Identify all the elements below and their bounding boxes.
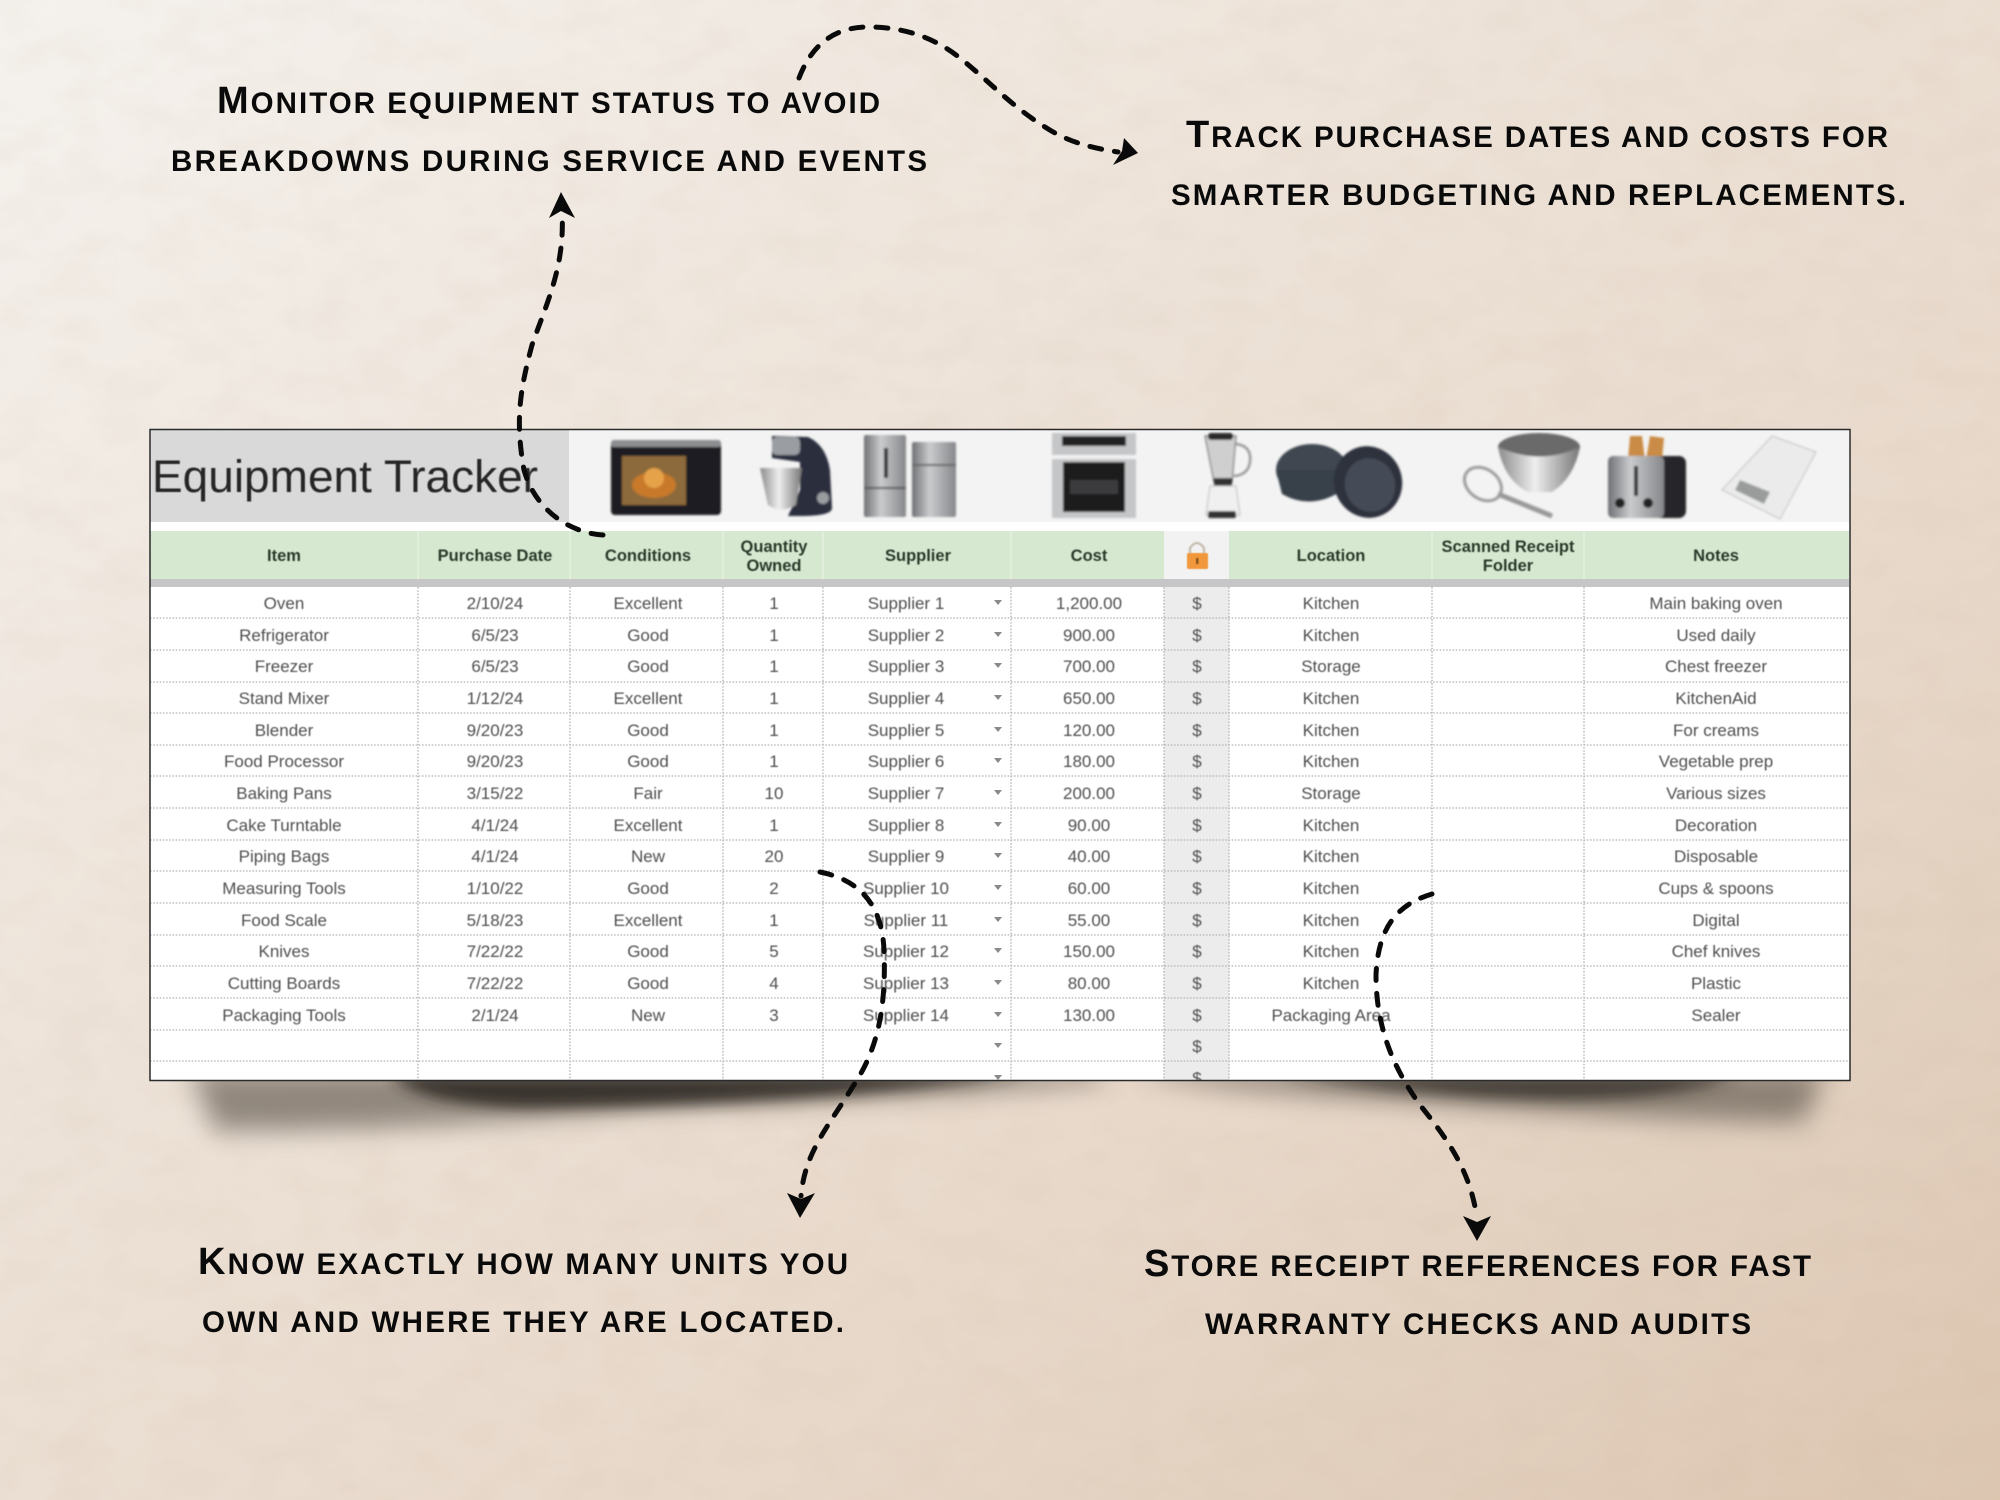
caption: monitor equipment: BREAKDOWNS DURING SERVICE AND EVENTS: [171, 145, 927, 178]
row: Cutting Boards: [228, 974, 1742, 993]
row: Measuring Tools: Measuring Tools: [222, 879, 346, 898]
row: Knives: Good: [627, 942, 669, 961]
caption: track purchase: TRACK PURCHASE DATES AND COSTS FOR: [1186, 114, 1888, 156]
row: Knives: 150.00: [1063, 942, 1115, 961]
empty rows currency marks: [1192, 1037, 1202, 1088]
row: Refrigerator: 900.00: [1063, 626, 1115, 645]
row: Measuring Tools: Cups & spoons: [1658, 879, 1774, 898]
row: Packaging Tools: Supplier 14: [863, 1006, 949, 1025]
row: Knives: Knives: [258, 942, 310, 961]
row: Baking Pans: Baking Pans: [236, 784, 332, 803]
row: Stand Mixer: Supplier 4: [868, 689, 944, 708]
row: Baking Pans: Fair: [633, 784, 663, 803]
row: Stand Mixer: Excellent: [614, 689, 683, 708]
row: Food Scale: $: [1192, 911, 1202, 930]
row: Blender: $: [1192, 721, 1202, 740]
row: Food Processor: Food Processor: [224, 752, 344, 771]
row: Stand Mixer: 650.00: [1063, 689, 1115, 708]
row: Cutting Boards: Plastic: [1691, 974, 1742, 993]
row: Piping Bags: New: [631, 847, 666, 866]
table header row: Supplier: [885, 547, 952, 565]
row: Blender: 120.00: [1063, 721, 1115, 740]
row: Freezer: [255, 657, 1767, 676]
row: Blender: Blender: [255, 721, 314, 740]
caption: track purchase: SMARTER BUDGETING AND REPLACEMENTS.: [1171, 179, 1906, 212]
row: Freezer: Chest freezer: [1665, 657, 1767, 676]
row: Food Scale: [241, 911, 1740, 930]
row: Knives: $: [1192, 942, 1202, 961]
title block: [150, 430, 569, 522]
row: Refrigerator: Refrigerator: [239, 626, 329, 645]
row: Piping Bags: 20: [765, 847, 783, 866]
row: Stand Mixer: Stand Mixer: [239, 689, 330, 708]
row: Blender: [255, 721, 1759, 740]
row: Cutting Boards: $: [1192, 974, 1202, 993]
row: Food Scale: Food Scale: [241, 911, 327, 930]
row: Cake Turntable: Kitchen: [1303, 816, 1359, 835]
supplier dropdown markers: [994, 600, 1002, 1080]
arrow: to units caption: [787, 872, 884, 1218]
row: Food Processor: 180.00: [1063, 752, 1115, 771]
row: Packaging Tools: 3: [769, 1006, 779, 1025]
row: Baking Pans: 3/15/22: [467, 784, 523, 803]
row: Baking Pans: $: [1192, 784, 1202, 803]
icon: blender: [1205, 433, 1250, 518]
row: Stand Mixer: [239, 689, 1757, 708]
row: Cake Turntable: Decoration: [1675, 816, 1757, 835]
table header row: Item: [267, 547, 301, 565]
table header row: Location: [1297, 547, 1365, 565]
row: Freezer: Good: [627, 657, 669, 676]
row: Food Processor: Vegetable prep: [1659, 752, 1773, 771]
row: Cake Turntable: 90.00: [1068, 816, 1110, 835]
caption: know units: [198, 1241, 848, 1339]
row: Food Processor: [224, 752, 1773, 771]
row: Cutting Boards: 7/22/22: [467, 974, 523, 993]
row: Cake Turntable: 4/1/24: [471, 816, 519, 835]
row: Cake Turntable: $: [1192, 816, 1202, 835]
row: Baking Pans: Various sizes: [1666, 784, 1766, 803]
icon: wall oven: [1052, 433, 1136, 518]
row: Food Scale: Kitchen: [1303, 911, 1359, 930]
row: Refrigerator: Supplier 2: [868, 626, 944, 645]
row: Food Processor: 9/20/23: [467, 752, 523, 771]
row: Packaging Tools: [222, 1006, 1741, 1025]
row: Cutting Boards: Good: [627, 974, 669, 993]
row: Blender: 9/20/23: [467, 721, 523, 740]
row: Stand Mixer: 1/12/24: [467, 689, 523, 708]
row: Freezer: 6/5/23: [471, 657, 519, 676]
row: Freezer: Supplier 3: [868, 657, 944, 676]
row: Knives: Kitchen: [1303, 942, 1359, 961]
row: Food Scale: 55.00: [1068, 911, 1110, 930]
row: Piping Bags: Disposable: [1674, 847, 1758, 866]
row: Baking Pans: Supplier 7: [868, 784, 944, 803]
row: Piping Bags: 40.00: [1068, 847, 1110, 866]
caption: store receipts: STORE RECEIPT REFERENCES FOR FAST: [1144, 1243, 1811, 1285]
caption: know units: KNOW EXACTLY HOW MANY UNITS YOU: [198, 1241, 848, 1283]
empty rows currency marks: $: [1192, 1037, 1202, 1056]
row: Oven: 1: [769, 594, 779, 613]
row: Food Processor: Good: [627, 752, 669, 771]
table header row: Cost: [1071, 547, 1108, 565]
row: Stand Mixer: Kitchen: [1303, 689, 1359, 708]
table header row: Owned: [746, 557, 802, 575]
row: Baking Pans: Storage: [1301, 784, 1361, 803]
row: Measuring Tools: Kitchen: [1303, 879, 1359, 898]
row: Refrigerator: 1: [769, 626, 779, 645]
row: Packaging Tools: Packaging Tools: [222, 1006, 346, 1025]
row: Food Processor: Supplier 6: [868, 752, 944, 771]
row: Freezer: 700.00: [1063, 657, 1115, 676]
row: Freezer: 1: [769, 657, 779, 676]
row: Refrigerator: Used daily: [1676, 626, 1756, 645]
row: Freezer: Freezer: [255, 657, 314, 676]
table header row: Purchase Date: [438, 547, 552, 565]
row: Measuring Tools: Good: [627, 879, 669, 898]
caption: track purchase: [1171, 114, 1906, 212]
icon: kitchen scale: [1722, 436, 1816, 519]
row: Piping Bags: Kitchen: [1303, 847, 1359, 866]
arrow: to purchase caption: [799, 27, 1138, 165]
caption: monitor equipment: MONITOR EQUIPMENT STATUS TO AVOID: [217, 80, 880, 122]
row: Oven: 1,200.00: [1056, 594, 1122, 613]
row: Refrigerator: Good: [627, 626, 669, 645]
equipment tracker spreadsheet: [150, 430, 1850, 1088]
row: Piping Bags: Piping Bags: [239, 847, 329, 866]
row: Piping Bags: 4/1/24: [471, 847, 519, 866]
row: Cutting Boards: Cutting Boards: [228, 974, 340, 993]
row: Refrigerator: Kitchen: [1303, 626, 1359, 645]
icon: toaster: [1608, 436, 1686, 518]
row: Piping Bags: Supplier 9: [868, 847, 944, 866]
row: Baking Pans: [236, 784, 1766, 803]
row: Cutting Boards: Supplier 13: [863, 974, 949, 993]
row: Knives: 5: [769, 942, 779, 961]
caption: store receipts: [1144, 1243, 1811, 1341]
row: Cake Turntable: [226, 816, 1757, 835]
row: Oven: Supplier 1: [868, 594, 944, 613]
row: Food Scale: Digital: [1692, 911, 1740, 930]
row: Stand Mixer: KitchenAid: [1675, 689, 1757, 708]
row: Packaging Tools: Sealer: [1691, 1006, 1741, 1025]
row: Packaging Tools: 2/1/24: [471, 1006, 519, 1025]
row: Measuring Tools: $: [1192, 879, 1202, 898]
row: Freezer: $: [1192, 657, 1202, 676]
row: Refrigerator: [239, 626, 1756, 645]
table body rows: [150, 587, 1849, 1088]
row: Food Scale: 1: [769, 911, 779, 930]
row: Piping Bags: $: [1192, 847, 1202, 866]
caption: know units: OWN AND WHERE THEY ARE LOCATED.: [202, 1306, 844, 1339]
table drop shadow: [190, 1070, 1825, 1130]
row: Baking Pans: 10: [765, 784, 783, 803]
row: Packaging Tools: Packaging Area: [1271, 1006, 1391, 1025]
row: Cake Turntable: 1: [769, 816, 779, 835]
row: Food Processor: 1: [769, 752, 779, 771]
row: Cake Turntable: Supplier 8: [868, 816, 944, 835]
table header row: Conditions: [605, 547, 691, 565]
row: Knives: [258, 942, 1760, 961]
row: Refrigerator: 6/5/23: [471, 626, 519, 645]
table header row: [150, 531, 1849, 587]
row: Food Processor: $: [1192, 752, 1202, 771]
icon: baking pans: [1276, 437, 1411, 527]
caption: monitor equipment: [171, 80, 927, 178]
row: Measuring Tools: 60.00: [1068, 879, 1110, 898]
row: Oven: Kitchen: [1303, 594, 1359, 613]
table header row: Notes: [1693, 547, 1739, 565]
arrow: to monitor caption: [519, 192, 603, 535]
row: Food Scale: Excellent: [614, 911, 683, 930]
row: Knives: Supplier 12: [863, 942, 949, 961]
row: Cutting Boards: 80.00: [1068, 974, 1110, 993]
icon: microwave: [611, 440, 721, 515]
header image strip: [569, 430, 1849, 522]
row: Baking Pans: 200.00: [1063, 784, 1115, 803]
row: Food Scale: Supplier 11: [864, 911, 948, 930]
row: Food Scale: 5/18/23: [467, 911, 523, 930]
row: Blender: 1: [769, 721, 779, 740]
caption: store receipts: WARRANTY CHECKS AND AUDITS: [1205, 1308, 1751, 1341]
arrow: to receipt caption: [1376, 894, 1491, 1241]
row: Oven: Main baking oven: [1649, 594, 1783, 613]
row: Blender: Kitchen: [1303, 721, 1359, 740]
row: Oven: Oven: [264, 594, 304, 613]
table header row: Folder: [1483, 557, 1534, 575]
row: Knives: Chef knives: [1672, 942, 1760, 961]
row: Cutting Boards: 4: [769, 974, 779, 993]
title block: Equipment Tracker: [152, 451, 538, 502]
row: Measuring Tools: Supplier 10: [863, 879, 949, 898]
empty rows currency marks: $: [1192, 1069, 1202, 1088]
row: Oven: 2/10/24: [467, 594, 523, 613]
row: Blender: Supplier 5: [868, 721, 944, 740]
row: Stand Mixer: 1: [769, 689, 779, 708]
row: Oven: [264, 594, 1783, 613]
icon: lock: [1187, 543, 1208, 569]
row: Packaging Tools: New: [631, 1006, 666, 1025]
table header row: Scanned Receipt: [1442, 538, 1575, 556]
icon: refrigerators: [864, 435, 956, 517]
table header row: Quantity: [741, 538, 808, 556]
row: Blender: For creams: [1673, 721, 1759, 740]
row: Measuring Tools: 1/10/22: [467, 879, 523, 898]
row: Refrigerator: $: [1192, 626, 1202, 645]
row: Oven: $: [1192, 594, 1202, 613]
row: Knives: 7/22/22: [467, 942, 523, 961]
row: Cake Turntable: Excellent: [614, 816, 683, 835]
row: Packaging Tools: $: [1192, 1006, 1202, 1025]
row: Blender: Good: [627, 721, 669, 740]
icon: mixing bowl and whisk: [1458, 433, 1580, 516]
row: Cutting Boards: Kitchen: [1303, 974, 1359, 993]
row: Oven: Excellent: [614, 594, 683, 613]
row: Food Processor: Kitchen: [1303, 752, 1359, 771]
row: Cake Turntable: Cake Turntable: [226, 816, 342, 835]
row: Measuring Tools: 2: [769, 879, 779, 898]
row: Measuring Tools: [222, 879, 1774, 898]
row: Stand Mixer: $: [1192, 689, 1202, 708]
row: Piping Bags: [239, 847, 1758, 866]
row: Packaging Tools: 130.00: [1063, 1006, 1115, 1025]
icon: stand mixer: [760, 436, 832, 516]
row: Freezer: Storage: [1301, 657, 1361, 676]
